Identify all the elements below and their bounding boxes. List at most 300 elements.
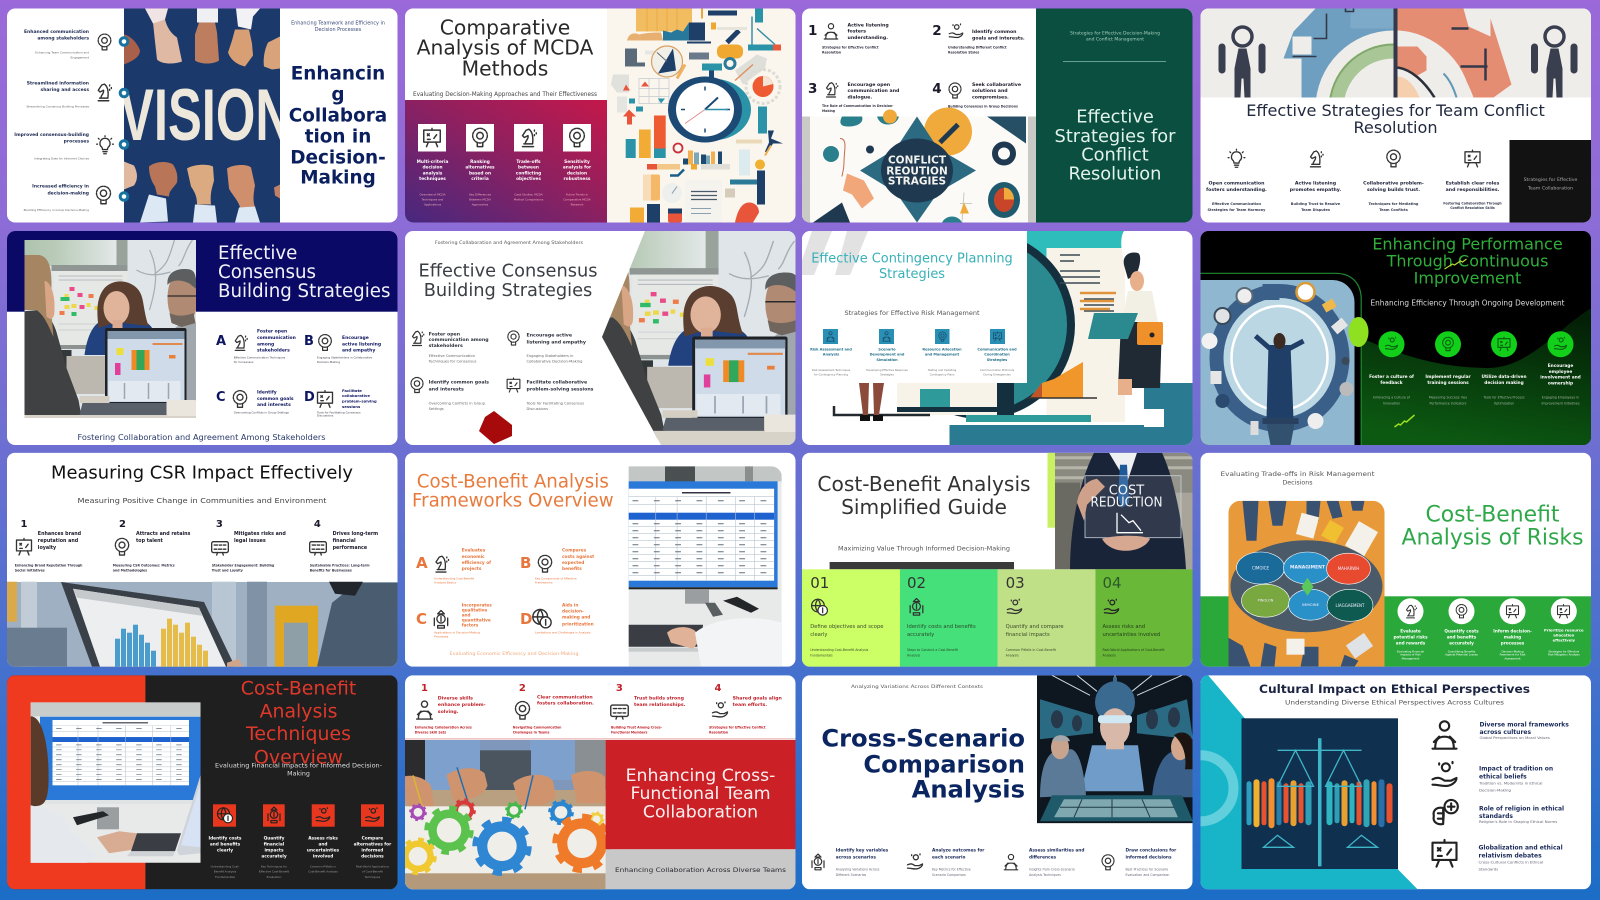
column 01: clearly <box>810 632 828 638</box>
item: trade-offs <box>514 124 544 202</box>
item: identify common goals: Identify common goals <box>429 379 489 385</box>
item: clear roles: Fostering Collaboration Through <box>1443 202 1502 206</box>
item D: Limitations and Challenges in Analysis <box>535 631 591 635</box>
title: Analysis of Risks <box>1402 525 1584 550</box>
photo: futuristic briefing table <box>1037 675 1193 823</box>
item: sensitivity: decision <box>567 170 587 176</box>
title: Enhancing Performance <box>1372 234 1563 253</box>
item A: A <box>416 554 428 572</box>
illustration: conflict resolution compass: STRAGIES <box>888 176 946 188</box>
item: open communication: Effective Communication <box>1212 202 1262 206</box>
item 3: team relationships. <box>634 701 686 707</box>
item: risk assessment: Risk Assessment and <box>810 347 852 351</box>
item D <box>304 388 377 418</box>
item: encourage active listening <box>508 331 586 364</box>
item: sensitivity: Comparative MCDA <box>563 198 591 202</box>
item: globalization: Globalization and ethical <box>1478 844 1563 851</box>
item: key variables <box>812 847 889 877</box>
top caption: Analyzing Variations Across Different Contexts <box>851 684 984 690</box>
item 2: Attracts and retains <box>136 531 191 537</box>
item A <box>216 328 296 364</box>
item: analyze outcomes <box>908 847 985 877</box>
photo: analyst at monitor <box>31 702 201 863</box>
item: ranking <box>465 124 495 206</box>
item: inform decision: processes <box>1501 640 1525 645</box>
item: sensitivity <box>563 124 592 206</box>
item: sensitivity: Research <box>571 202 584 206</box>
title: Making <box>300 167 376 188</box>
lime bar <box>1048 453 1055 528</box>
item A: efficiency of <box>462 560 491 566</box>
card: Cost-Benefit Analysis Simplified Guide <box>802 453 1193 667</box>
item: active listening <box>1290 151 1341 212</box>
item 1: 1 <box>421 683 428 694</box>
item: compare alternatives: Techniques <box>364 875 381 879</box>
column 03: Common Pitfalls in Cost-Benefit <box>1006 648 1057 652</box>
item: enhanced communication: among stakeholders <box>37 35 89 41</box>
item D: decision- <box>562 608 584 614</box>
item 4: Strategies for Effective Conflict <box>709 725 766 729</box>
item 3 <box>808 81 899 113</box>
item 2: Clear communication <box>537 694 593 700</box>
item: impact of tradition: Impact of tradition on <box>1479 765 1553 772</box>
grey footer panel <box>606 849 796 889</box>
item: encourage active listening: Engaging Stakeholders in <box>526 354 574 358</box>
gradient panel <box>405 100 607 222</box>
item: inform decision: Assessment <box>1504 657 1521 661</box>
illustration: man conducting inside wheel <box>1200 280 1354 445</box>
accent blob <box>1348 317 1368 347</box>
card: Cross-Scenario Comparison Analysis <box>802 675 1193 889</box>
item: open communication <box>1206 149 1267 212</box>
panel title: Resolution <box>1069 163 1161 184</box>
item: scenario development: Developing Effective Response <box>866 368 908 372</box>
card: Cost-Benefit Analysis Frameworks Overview <box>405 453 796 667</box>
item 1: 1 <box>808 23 817 39</box>
item 3: Making <box>822 109 836 113</box>
item 1: Resolution <box>822 50 842 54</box>
item: quantify costs: Quantifying Benefits <box>1448 649 1476 653</box>
item: improved consensus-building <box>14 132 113 160</box>
item C: Overcoming Conflicts in Group Settings <box>234 411 289 415</box>
card: Measuring CSR Impact Effectively <box>7 453 398 667</box>
item 1: solving. <box>438 708 459 714</box>
quote marks <box>797 231 868 275</box>
item C: Identify <box>257 389 277 395</box>
item: assess similarities <box>1004 847 1084 877</box>
green squiggle <box>1394 415 1414 427</box>
item A: economic <box>462 554 485 560</box>
black corner box: Team Collaboration <box>1527 185 1573 191</box>
photo: meeting in angled frame <box>563 208 834 474</box>
top caption: Fostering Collaboration and Agreement Among Stakeholders <box>435 240 583 245</box>
photo: businessman with COST REDUCTION <box>1055 453 1193 570</box>
card: Cost-Benefit Analysis of Risks <box>1200 453 1591 667</box>
item 2: and Methodologies <box>113 568 147 572</box>
item A: Analysis Basics <box>434 580 456 584</box>
item: quantify costs: and benefits <box>1447 634 1477 639</box>
green band <box>1200 596 1591 667</box>
item: draw conclusions: Evaluation and Comparison <box>1126 873 1169 877</box>
item: globalization: Standards <box>1478 866 1498 871</box>
item: trade-offs: Case Studies: MCDA <box>514 192 543 196</box>
item: foster feedback: Innovation <box>1383 401 1400 405</box>
title: Collaboration <box>643 803 758 823</box>
item: identify common goals <box>411 378 489 411</box>
item: employee involvement: Improvement Initiatives <box>1541 401 1580 405</box>
item: ranking: Key Differences <box>469 192 491 196</box>
item: facilitate collaborative: Tools for Facilitating Consensus <box>526 401 584 405</box>
title: Simplified Guide <box>841 495 1007 519</box>
item: enhanced communication: Enhancing Team Communication and <box>35 50 89 54</box>
item: quantify financial impacts <box>259 804 290 879</box>
photo: management diagram table: MAHARWH <box>1338 566 1359 571</box>
item: foster feedback: feedback <box>1380 380 1403 386</box>
photo: VISION hands on navy table <box>120 8 292 222</box>
item: facilitate collaborative: problem-solving sessions <box>526 386 594 392</box>
photo: VISION hands on navy table: VISION <box>120 75 292 156</box>
item: compare alternatives: Compare <box>362 835 383 841</box>
item: identify costs: clearly <box>217 847 233 853</box>
item: identify common goals: Overcoming Conflicts in Group <box>429 401 486 405</box>
item: trade-offs: between <box>518 164 539 170</box>
column 04: Real-World Applications of Cost-Benefit <box>1102 648 1165 652</box>
item B: benefits <box>562 566 582 572</box>
item B: costs against <box>562 554 594 560</box>
column 04: Assess risks and <box>1102 624 1145 630</box>
item: facilitate collaborative: Facilitate collaborative <box>526 379 587 385</box>
item B <box>520 547 594 584</box>
black corner box: Strategies for Effective <box>1524 176 1578 182</box>
item: prioritize resources <box>1544 598 1584 657</box>
subtitle: Evaluating Decision-Making Approaches and Their Effectiveness <box>413 91 597 98</box>
item: multi-criteria: analysis <box>423 170 443 176</box>
item: identify costs <box>208 804 242 879</box>
item: identify costs: Fundamentals <box>215 875 235 879</box>
item 2 <box>113 519 191 572</box>
illustration: woman, globe and bars <box>834 231 1192 445</box>
item: employee involvement: involvement and <box>1540 374 1581 380</box>
photo: hands and coloured gears <box>401 740 608 889</box>
item: sensitivity: Future Trends in <box>566 192 588 196</box>
item: diverse moral frameworks: Diverse moral frameworks <box>1480 721 1569 728</box>
item: trade-offs: objectives <box>516 176 541 182</box>
item: improved consensus-building: processes <box>64 138 89 144</box>
item: draw conclusions <box>1102 847 1177 877</box>
item: foster feedback <box>1369 331 1414 405</box>
item: risk assessment: Analysis <box>823 353 839 357</box>
item 4: team efforts. <box>733 701 767 707</box>
panel subtitle: Strategies for Effective Decision-Making <box>1070 30 1160 36</box>
item 3: Trust and Loyalty <box>212 568 244 572</box>
item: ranking: alternatives <box>465 164 495 170</box>
item: compare alternatives: of Cost-Benefit <box>362 870 384 874</box>
item 2: Challenges in Teams <box>513 730 549 734</box>
item 3: legal issues <box>234 538 266 544</box>
item B: B <box>304 334 314 349</box>
item: resource allocation: and Management <box>925 353 959 357</box>
item: evaluate potential risks: and rewards <box>1396 640 1426 645</box>
item C <box>416 602 492 638</box>
item: diverse moral frameworks: across cultures <box>1480 728 1531 735</box>
item 3: 3 <box>808 81 817 97</box>
item: clear roles: Establish clear roles <box>1446 180 1499 186</box>
subtitle: Maximizing Value Through Informed Decision-Making <box>838 546 1010 553</box>
item: diverse moral frameworks <box>1432 721 1569 749</box>
title: Cost-Benefit Analysis <box>417 471 609 492</box>
item 3: 3 <box>216 519 223 530</box>
illustration: clock and charts <box>607 8 796 222</box>
item: ranking: based on <box>469 170 491 176</box>
item: key variables: Different Scenarios <box>836 873 867 877</box>
item 1: 1 <box>21 519 28 530</box>
item: foster feedback: Embracing a Culture of <box>1373 396 1411 400</box>
item 1: Enhancing Brand Reputation Through <box>15 563 83 567</box>
item: multi-criteria: techniques <box>419 176 446 182</box>
card: Effective Consensus Building Strategies (white) <box>405 208 834 474</box>
subtitle: Understanding Diverse Ethical Perspectives Across Cultures <box>1285 699 1504 706</box>
column 04 <box>1095 569 1192 667</box>
item: employee involvement: employee <box>1549 368 1572 374</box>
item 1: loyalty <box>38 545 57 551</box>
item 3: Functional Members <box>611 730 648 734</box>
item: evaluate potential risks: Impacts of Risk <box>1400 653 1421 657</box>
column 01: 01 <box>810 574 829 592</box>
photo: meeting around laptop <box>24 240 196 418</box>
item: foster open communication <box>412 331 489 364</box>
column 02: Steps to Conduct a Cost-Benefit <box>907 648 959 652</box>
item 1: Social Initiatives <box>15 568 45 572</box>
item: key variables: Identify key variables <box>836 847 889 853</box>
dark bar <box>830 562 1014 569</box>
item: collaborative problem-solving <box>1363 150 1424 212</box>
item: active listening: promotes empathy. <box>1290 186 1341 192</box>
illustration: scales and people <box>1242 718 1398 869</box>
item: increased efficiency: Boosting Efficiency in Group Decision-Making <box>24 208 89 212</box>
white title panel <box>802 231 1027 383</box>
item: clear roles <box>1443 150 1502 210</box>
item: key variables: Analyzing Variations Across <box>836 867 880 871</box>
item B: expected <box>562 560 584 566</box>
item A: Evaluates <box>462 547 486 553</box>
item 2: 2 <box>932 23 942 39</box>
item: improved consensus-building: Improved consensus-building <box>14 132 89 138</box>
item B: B <box>520 554 531 572</box>
item: assess similarities: differences <box>1029 854 1056 860</box>
item: foster open communication: Techniques for Consensus <box>428 360 476 364</box>
item: streamlined information: Streamlining Consensus Building Processes <box>26 104 89 108</box>
item: quantify financial impacts: Key Techniques for <box>261 865 288 869</box>
item B: Compares <box>562 547 587 553</box>
item: analyze outcomes: Scenario Comparison <box>932 873 966 877</box>
item 3 <box>212 519 286 572</box>
item: prioritize resources: allocation <box>1553 632 1575 637</box>
item: evaluate potential risks: Management <box>1402 657 1419 661</box>
item: facilitate collaborative <box>507 378 594 411</box>
item C: common goals <box>257 396 294 402</box>
item 4: Shared goals align <box>733 695 782 701</box>
green frame line <box>1200 273 1361 445</box>
card: Effective Strategies for Conflict Resolution <box>802 8 1192 222</box>
item: identify costs: and benefits <box>210 841 241 847</box>
item B: Engaging Stakeholders in Collaborative <box>317 356 372 360</box>
item: assess risks: and <box>318 841 328 847</box>
item A: A <box>216 334 226 349</box>
title: Comparative <box>440 16 570 40</box>
item 4: Drives long-term <box>333 531 378 537</box>
photo: management diagram table: LIAGGAEMENT <box>1336 603 1365 608</box>
column 03 <box>998 569 1095 667</box>
item 1: enhance problem- <box>438 701 486 707</box>
item: enhanced communication <box>24 28 111 60</box>
title: Effective Contingency Planning <box>811 251 1013 266</box>
title: Frameworks Overview <box>412 490 614 511</box>
item: evaluate potential risks <box>1393 598 1428 661</box>
panel subtitle: and Conflict Management <box>1086 36 1144 42</box>
item: regular training: training sessions <box>1427 380 1469 386</box>
item 4 <box>709 683 782 734</box>
illustration: two figures and split head <box>1200 8 1591 98</box>
item: assess risks: Cost-Benefit Analysis <box>308 870 338 874</box>
column 01: Fundamentals <box>810 653 833 657</box>
item 1: Active listening <box>848 22 889 28</box>
item: inform decision <box>1493 598 1532 661</box>
item 2: Navigating Communication <box>513 725 562 729</box>
item: facilitate collaborative: Discussions <box>526 407 548 411</box>
item A: communication <box>257 334 296 340</box>
item: increased efficiency: decision-making <box>47 190 89 196</box>
item: employee involvement: Encourage <box>1548 362 1573 368</box>
item: identify costs: Benefit Analysis <box>214 870 237 874</box>
item 2: goals and interests. <box>972 35 1025 41</box>
item: active listening: Active listening <box>1295 180 1336 186</box>
item: evaluate potential risks: Evaluating Financial <box>1397 649 1424 653</box>
title: Through Continuous <box>1386 251 1548 270</box>
illustration: conflict resolution compass: REOUTION <box>886 166 948 178</box>
item 2: 2 <box>519 683 526 694</box>
item: ranking: Between MCDA <box>469 198 491 202</box>
item: evaluate potential risks: potential risks <box>1393 634 1428 639</box>
item 4: 4 <box>932 81 942 97</box>
item: active listening: Building Trust to Resolve <box>1291 202 1341 206</box>
card: Effective Contingency Planning Strategies <box>797 231 1192 445</box>
item C: Incorporates <box>462 602 492 607</box>
card: Cost-Benefit Analysis Techniques Overview <box>7 675 398 889</box>
item: impact of tradition: Decision-Making <box>1479 787 1512 792</box>
item: inform decision: Decision-Making <box>1501 649 1524 653</box>
item: trade-offs: Trade-offs <box>516 158 541 164</box>
item A: Understanding Cost-Benefit <box>434 576 475 580</box>
card: Enhancing Collaboration in Decision-Making <box>7 8 398 222</box>
item: globalization: Cross-Cultural Conflicts in Ethical <box>1478 859 1543 864</box>
item: data-driven: Tools for Effective Process <box>1482 396 1525 400</box>
item: multi-criteria: Overview of MCDA <box>419 192 446 196</box>
photo: businessman with COST REDUCTION: REDUCTION <box>1090 495 1162 510</box>
item: identify common goals: and interests <box>429 386 464 392</box>
photo: businessman with COST REDUCTION: COST <box>1109 483 1144 498</box>
title: Measuring CSR Impact Effectively <box>51 463 353 484</box>
card: Effective Consensus Building Strategies (navy) <box>7 231 398 445</box>
subtitle: Making <box>287 770 310 777</box>
title: Techniques <box>245 723 351 745</box>
item: role of religion: Role of religion in ethical <box>1479 805 1564 812</box>
item: analyze outcomes: Analyze outcomes for <box>932 847 985 853</box>
item B: active listening <box>342 341 381 347</box>
item D: Facilitate <box>342 388 362 392</box>
item 1: Strategies for Effective Conflict <box>822 46 879 50</box>
grey footer panel: Enhancing Collaboration Across Diverse Teams <box>615 866 787 874</box>
item: identify common goals: Settings <box>429 407 444 411</box>
item: enhanced communication: Engagement <box>71 56 90 60</box>
column 02: 02 <box>907 574 926 592</box>
item 4: financial <box>333 538 356 544</box>
item D: Tools for Facilitating Consensus <box>316 410 361 414</box>
title: Building Strategies <box>218 280 390 302</box>
item: collaborative problem-solving: Team Conflicts <box>1379 208 1408 212</box>
item: employee involvement: Engaging Employees in <box>1542 396 1579 400</box>
item: quantify financial impacts: impacts <box>264 847 284 853</box>
title: Cost-Benefit Analysis <box>817 472 1031 496</box>
item: quantify costs: Quantify costs <box>1444 628 1479 633</box>
item: assess risks: Assess risks <box>308 835 338 841</box>
item: quantify costs: accurately <box>1449 640 1474 645</box>
subtitle: Measuring Positive Change in Communities and Environment <box>78 496 327 505</box>
item: analyze outcomes: each scenario <box>932 854 965 860</box>
item 1 <box>15 519 83 572</box>
item 4: Sustainable Practices: Long-term <box>310 563 370 567</box>
subtitle: Decision Processes <box>315 27 362 33</box>
item: open communication: Strategies for Team Harmony <box>1208 208 1266 212</box>
item: communication and coordination: Communication and <box>977 347 1017 351</box>
item D <box>520 602 594 635</box>
item C: and interests <box>257 402 291 408</box>
item C: factors <box>462 622 479 627</box>
item: data-driven <box>1481 331 1527 405</box>
item: increased efficiency <box>24 183 110 212</box>
item 4 <box>310 519 378 572</box>
item 1: understanding. <box>848 34 888 40</box>
item: identify costs: Identify costs <box>208 835 242 841</box>
column 01: Define objectives and scope <box>810 624 883 630</box>
red title panel <box>606 740 796 849</box>
item: compare alternatives: alternatives for <box>354 841 392 847</box>
item: risk assessment <box>810 329 852 377</box>
item 2: Resolution Styles <box>948 50 979 54</box>
item 1: fosters <box>848 28 866 34</box>
card: Comparative Analysis of MCDA Methods <box>405 8 796 222</box>
item: regular training: Measuring Success: Key <box>1429 396 1467 400</box>
item: foster feedback: Foster a culture of <box>1369 374 1414 380</box>
timeline rings <box>120 38 128 200</box>
item: communication and coordination <box>977 329 1017 377</box>
item: key variables: across scenarios <box>836 854 876 860</box>
item: communication and coordination: Communication Protocols <box>980 368 1015 372</box>
item: foster open communication: communication among <box>429 336 489 342</box>
item: multi-criteria: decision <box>422 164 443 170</box>
photo: management diagram table: IMMOINE <box>1302 602 1320 607</box>
item: sensitivity: robustness <box>564 176 591 182</box>
title: Effective Consensus <box>418 260 598 281</box>
item: quantify financial impacts: Quantify <box>264 835 285 841</box>
panel title: Conflict <box>1081 144 1149 165</box>
item 1: Enhancing Collaboration Across <box>415 725 472 729</box>
item: multi-criteria <box>417 124 448 206</box>
title: Analysis <box>912 775 1025 803</box>
item: enhanced communication: Enhanced communication <box>24 28 89 34</box>
subtitle: Decisions <box>1282 479 1313 486</box>
item: globalization <box>1432 840 1563 871</box>
title: Cross-Scenario <box>821 724 1025 752</box>
